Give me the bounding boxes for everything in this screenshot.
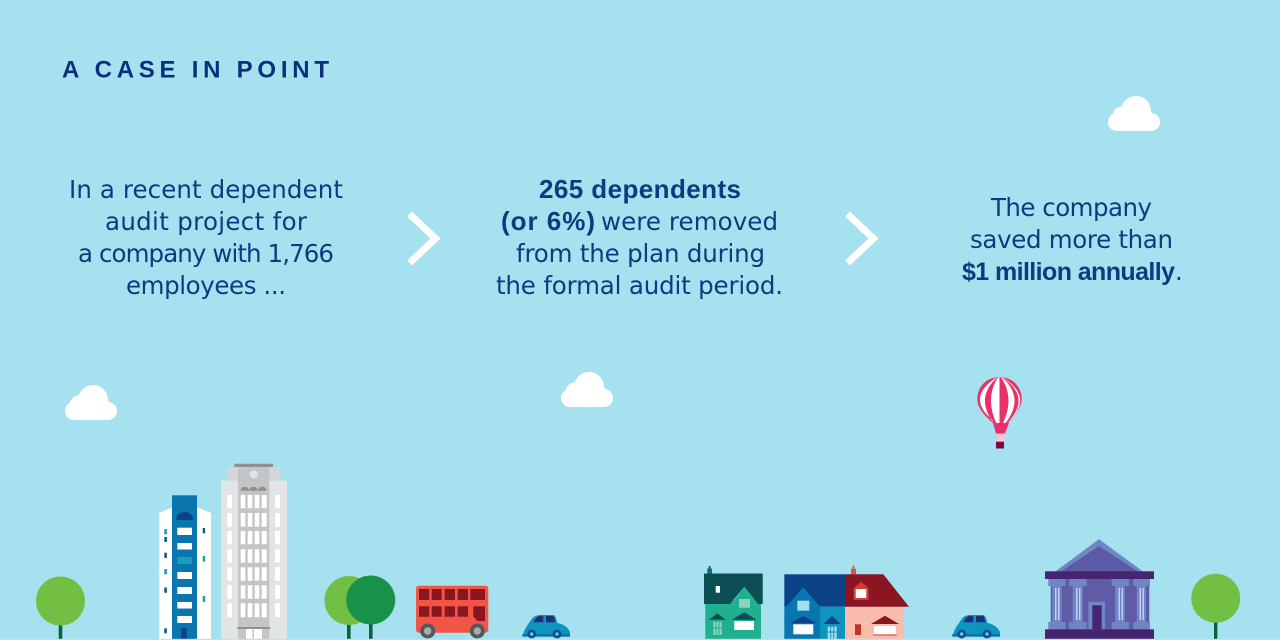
text block: dependents removed: were removed <box>601 207 778 236</box>
text block: audit project: a company with 1,766 <box>78 239 334 268</box>
title: A CASE IN POINT <box>62 56 329 84</box>
icon: second blue car <box>952 615 1000 638</box>
text block: savings: saved more than <box>970 225 1173 254</box>
arrow: second chevron <box>848 214 874 263</box>
icon: grey tower <box>221 464 287 640</box>
text block: savings: . <box>1175 257 1183 286</box>
icon: white and blue tower <box>159 495 211 640</box>
text block: dependents removed: the formal audit period. <box>496 271 783 300</box>
text block: dependents removed <box>496 174 783 300</box>
icon: red double-decker bus <box>416 586 488 638</box>
icon: classical bank building <box>1045 539 1154 640</box>
text block: audit project <box>69 175 343 300</box>
text block: savings <box>962 193 1183 286</box>
icon: left tree <box>36 576 85 640</box>
icon: blue house <box>784 574 845 640</box>
text block: dependents removed: 265 dependents <box>539 174 741 204</box>
icon: right tree <box>1191 574 1240 640</box>
icon: cloud left <box>65 385 117 420</box>
text block: audit project: employees ... <box>126 271 286 300</box>
icon: twin trees <box>324 576 395 640</box>
icon: cloud centre <box>561 372 613 407</box>
icon: blue car <box>522 615 570 638</box>
text block: savings: The company <box>990 193 1152 222</box>
text block: audit project: In a recent dependent <box>69 175 343 204</box>
text block: dependents removed: (or 6%) <box>501 206 595 236</box>
icon: cloud top right <box>1108 96 1160 131</box>
arrow: first chevron <box>410 214 436 263</box>
icon: hot air balloon <box>977 377 1022 448</box>
icon: green house <box>704 566 763 640</box>
text block: savings: $1 million annually <box>962 258 1175 286</box>
icon: red house <box>845 566 909 640</box>
text block: dependents removed: from the plan during <box>516 239 765 268</box>
text block: audit project: audit project for <box>105 207 308 236</box>
